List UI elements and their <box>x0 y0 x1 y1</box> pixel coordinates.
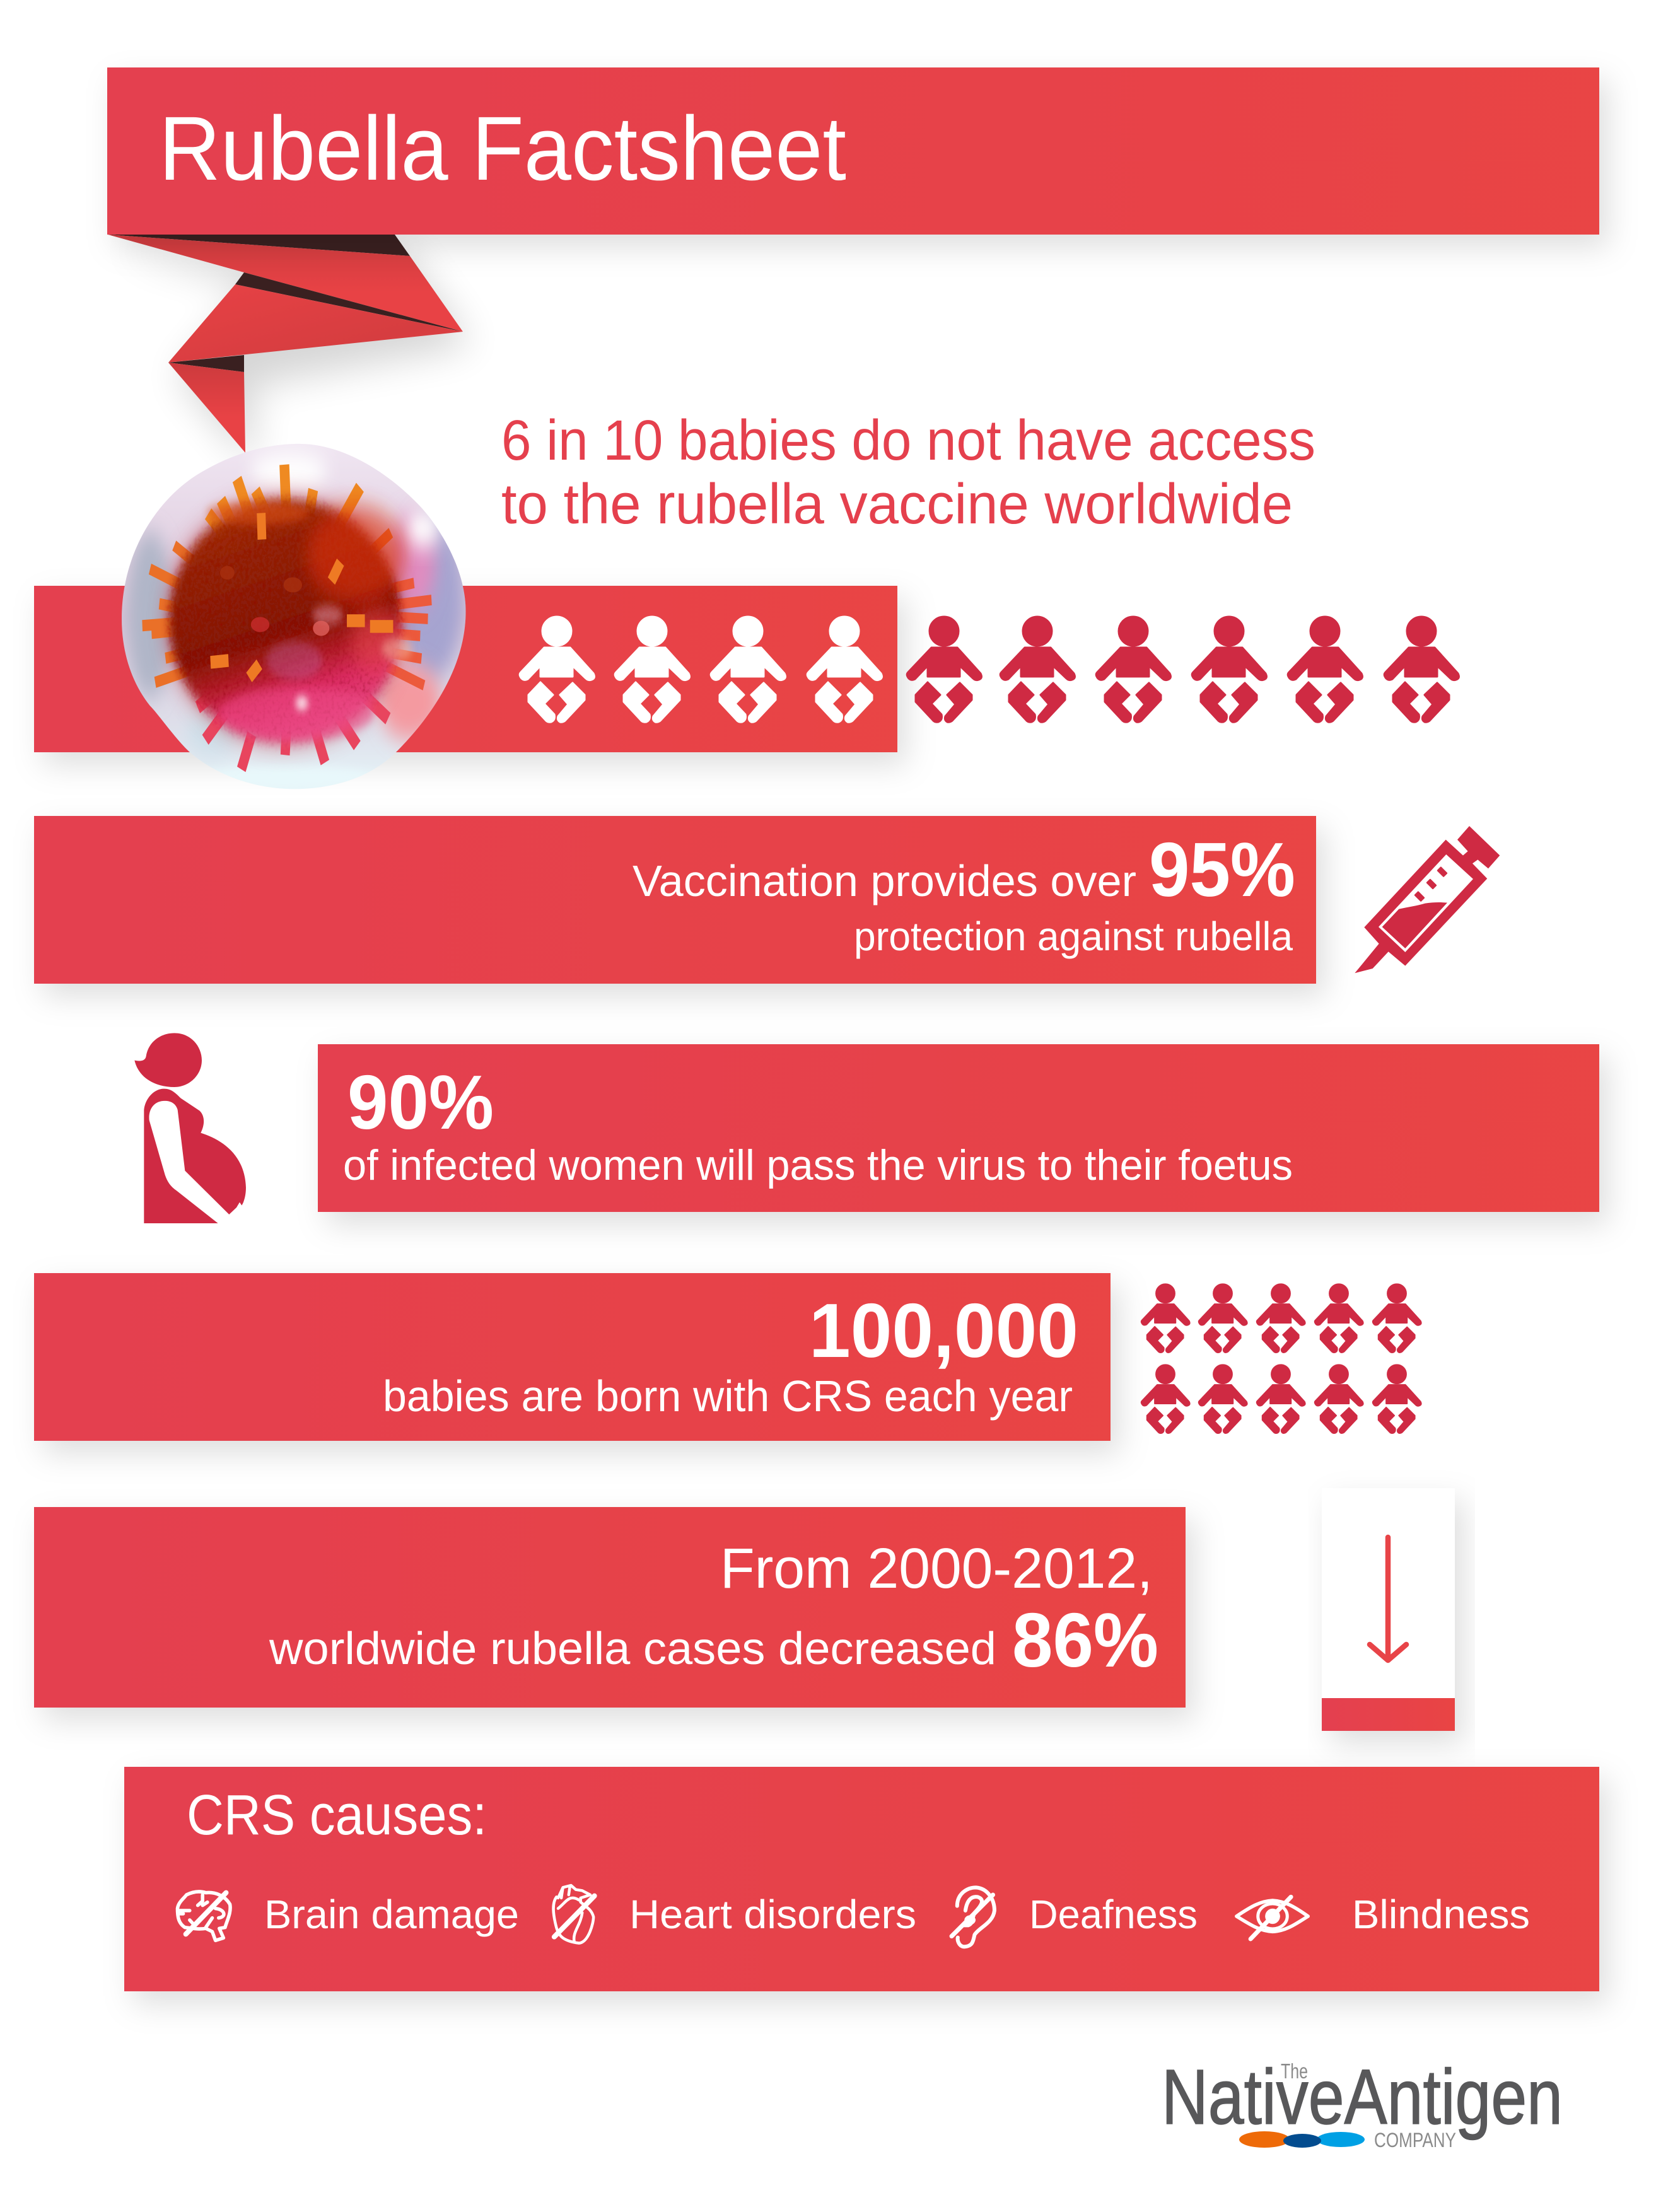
icons: six red babies <box>907 617 1459 722</box>
stat: 95%: 95% <box>1149 827 1295 912</box>
label: deafness: Deafness <box>1029 1892 1198 1937</box>
label: blindness: Blindness <box>1352 1892 1530 1937</box>
text: babies born with CRS: babies are born with CRS each year <box>383 1371 1073 1421</box>
icons: ten small red babies <box>1141 1284 1421 1433</box>
text: worldwide cases decreased: worldwide rubella cases decreased <box>269 1624 996 1674</box>
title banner <box>107 67 1599 235</box>
text: vaccination provides over: Vaccination provides over <box>633 856 1136 905</box>
text: protection against rubella: protection against rubella <box>854 914 1293 959</box>
text: from 2000-2012: From 2000-2012, <box>720 1537 1153 1600</box>
icons: four white babies <box>520 617 882 722</box>
heading: CRS causes: CRS causes: <box>187 1784 487 1847</box>
arrow: down <box>1370 1537 1406 1660</box>
title: Rubella Factsheet <box>159 98 846 199</box>
label: brain damage: Brain damage <box>264 1892 519 1937</box>
panel: decrease arrow card <box>1322 1488 1455 1731</box>
panel: 100,000 babies <box>34 1273 1111 1441</box>
logo: The Native Antigen Company: NativeAntigen <box>1162 2054 1563 2141</box>
panel: 90% pass virus <box>318 1044 1599 1212</box>
ribbon fold decoration <box>108 235 472 467</box>
text: infected women: of infected women will pass the virus to their foetus <box>343 1141 1293 1189</box>
logo: The Native Antigen Company: COMPANY <box>1374 2129 1456 2151</box>
panel: vaccination 95% <box>34 816 1316 984</box>
icon: pregnant woman <box>134 1033 246 1223</box>
stat: 90%: 90% <box>347 1059 494 1145</box>
panel: cases decreased 86% <box>34 1507 1186 1708</box>
icon: eye <box>1237 1897 1308 1939</box>
icon: syringe <box>1355 826 1500 973</box>
headline: vaccine access: to the rubella vaccine worldwide <box>501 473 1293 536</box>
headline: vaccine access <box>501 409 1315 536</box>
icon: ear <box>952 1887 994 1947</box>
label: heart disorders: Heart disorders <box>629 1892 916 1937</box>
panel: babies without vaccine access <box>34 586 1459 752</box>
panel: CRS causes <box>124 1767 1599 1991</box>
stat: 86%: 86% <box>1012 1597 1158 1683</box>
stat: 100,000: 100,000 <box>809 1288 1078 1373</box>
icon: heart <box>554 1885 595 1943</box>
icon: virus in bubble <box>122 444 466 789</box>
card base bar <box>1322 1698 1455 1731</box>
logo: The Native Antigen Company: The <box>1281 2059 1308 2083</box>
headline: vaccine access: 6 in 10 babies do not have access <box>501 409 1315 472</box>
icon: brain <box>177 1892 230 1940</box>
